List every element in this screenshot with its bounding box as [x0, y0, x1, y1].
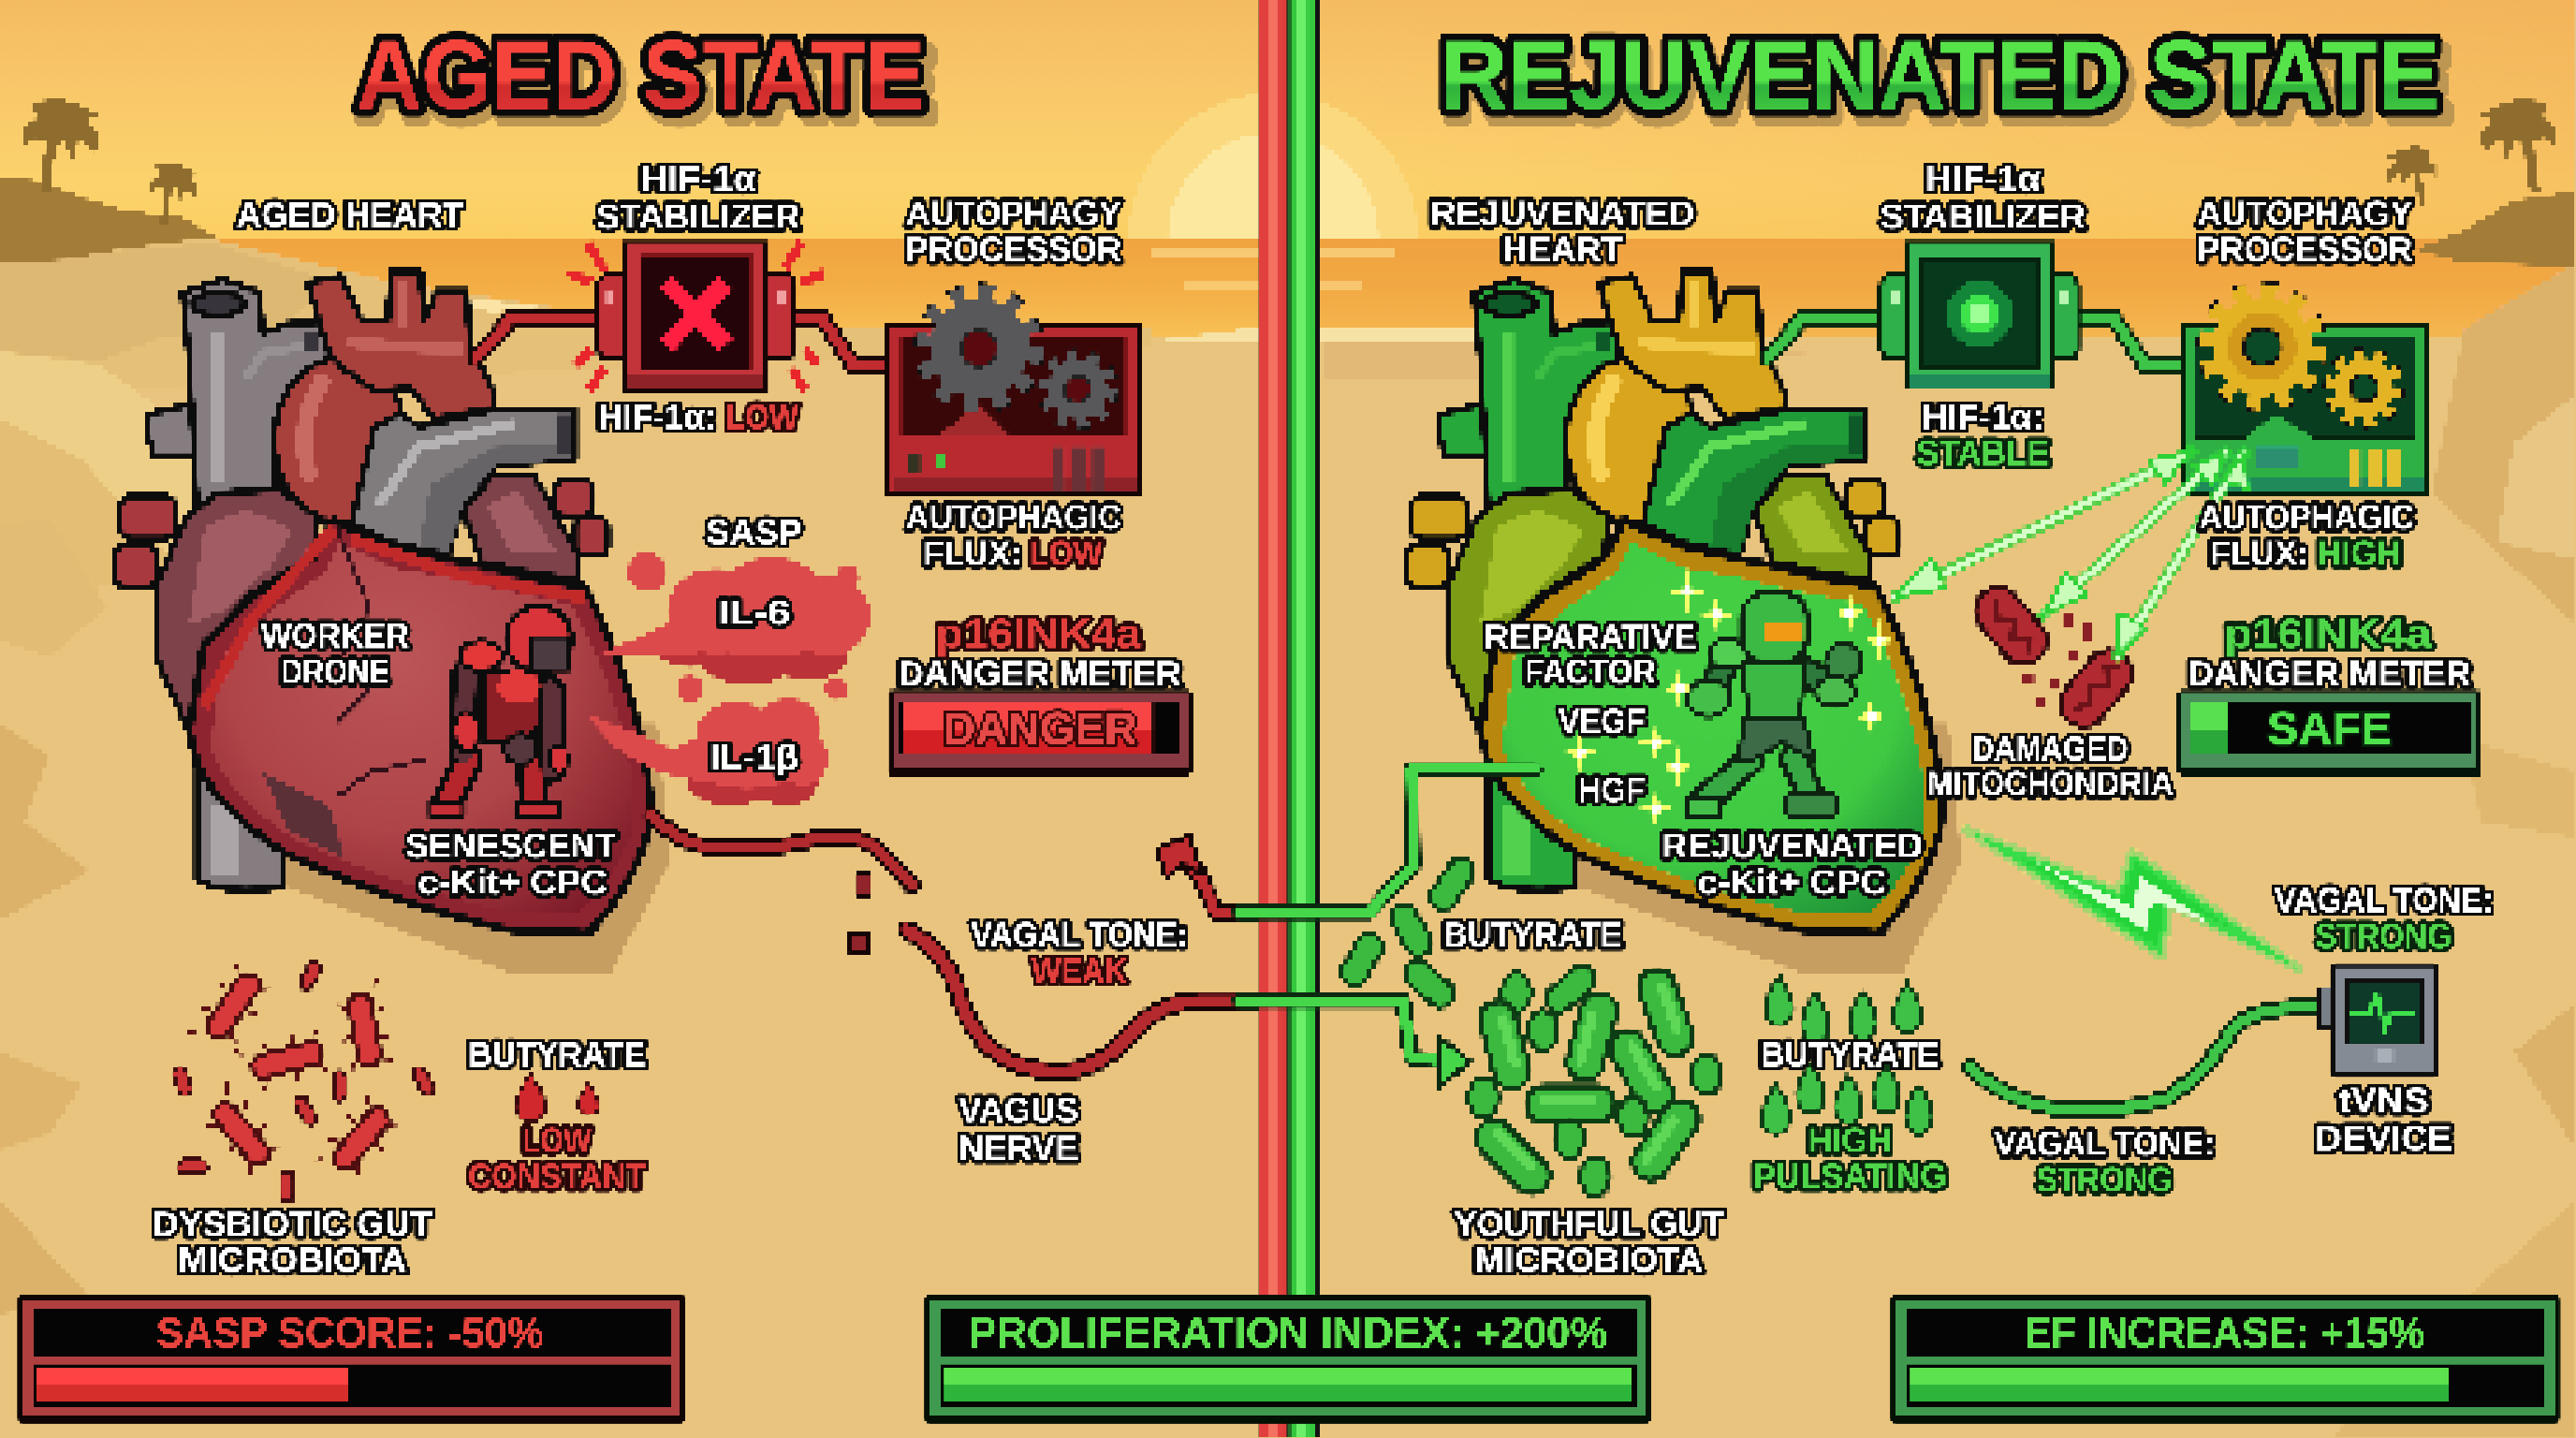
label: butyrate low constant: [468, 1035, 646, 1196]
label: HIF-1α stable: [1916, 398, 2049, 473]
label: HIF-1α stabilizer right: STABILIZER: [1881, 198, 2086, 236]
label: aged heart: AGED HEART: [237, 196, 463, 234]
label: vagal tone strong, cable: [1995, 1124, 2215, 1198]
label: autophagic flux high: HIGH: [2318, 535, 2401, 573]
tVNS cable: [1969, 1007, 2318, 1110]
aged heart: [115, 271, 670, 973]
label: p16INK4a danger meter: [899, 611, 1181, 693]
label: vagus nerve: VAGUS: [959, 1092, 1078, 1130]
headland left: [0, 178, 217, 263]
palm trees: [23, 98, 2556, 224]
aged worker drone figure: [431, 607, 572, 816]
label: dysbiotic gut microbiota: [153, 1205, 432, 1279]
icon: autophagy processor with grey gears: [889, 292, 1140, 493]
label: senescent c-Kit+ CPC: [406, 827, 617, 902]
labels: IL-6 and IL-1β: [710, 594, 798, 776]
aged gut bacteria: [171, 960, 437, 1201]
label: p16INK4a danger meter: p16INK4a: [936, 611, 1142, 657]
label: butyrate low constant: BUTYRATE: [468, 1035, 646, 1074]
title: rejuvenated state: REJUVENATED STATE: [1441, 21, 2439, 130]
label: HIF-1α stabilizer: STABILIZER: [596, 198, 800, 236]
green signal connection from heart across the divider: [1240, 769, 1534, 912]
label: HIF-1α stabilizer: [596, 160, 800, 236]
arrow: weak signal pointing back up-left: [1157, 835, 1258, 912]
meter text: danger: DANGER: [943, 704, 1137, 755]
label: worker drone: WORKER: [261, 617, 409, 655]
label: butyrate near gut: BUTYRATE: [1443, 916, 1622, 954]
label: rejuvenated heart: REJUVENATED: [1430, 194, 1694, 232]
label: tVNS device: DEVICE: [2316, 1120, 2452, 1158]
icon: damaged mitochondria: [1966, 579, 2142, 736]
label: autophagy processor right: [2197, 194, 2412, 269]
label: p16INK4a danger meter right: [2188, 611, 2471, 693]
vagus nerve, lower segment: [907, 930, 1258, 1072]
label: rejuvenated c-Kit+ CPC: REJUVENATED: [1661, 827, 1923, 865]
red butyrate droplets: [516, 1075, 599, 1123]
label: rejuvenated heart: [1430, 194, 1694, 269]
label: autophagic flux low: LOW: [1030, 535, 1103, 573]
label: butyrate high pulsating: [1753, 1035, 1947, 1196]
label: vagal tone weak: [971, 916, 1188, 990]
label: vagal tone strong, lightning: [2275, 881, 2493, 956]
label: HIF-1α low: HIF-1α:: [598, 398, 716, 436]
label: autophagic flux low: FLUX:: [923, 535, 1022, 573]
label: worker drone: DRONE: [281, 653, 389, 691]
label: autophagy processor right: AUTOPHAGY: [2197, 194, 2412, 232]
title: rejuvenated state: REJUVENATED STATE: [1444, 30, 2450, 139]
SASP cloud: IL-6: [593, 552, 871, 701]
label: vagal tone strong, cable: STRONG: [2036, 1160, 2173, 1198]
stat panel: EF increase: EF INCREASE: +15%: [2024, 1309, 2425, 1357]
rejuvenated c-Kit+ CPC figure: [1687, 594, 1862, 816]
stat panel: proliferation index: PROLIFERATION INDEX: +200%: [969, 1309, 1607, 1357]
label: butyrate high pulsating: BUTYRATE: [1761, 1035, 1939, 1074]
label: autophagic flux low: AUTOPHAGIC: [906, 498, 1121, 536]
SASP cloud: IL-1β: [583, 698, 828, 805]
label: reparative factor: FACTOR: [1525, 653, 1656, 691]
aged wires: [476, 317, 890, 366]
labels: IL-6 and IL-1β: IL-1β: [710, 738, 798, 776]
green butyrate droplets: [1763, 976, 1933, 1134]
label: butyrate high pulsating: PULSATING: [1753, 1157, 1947, 1196]
label: dysbiotic gut microbiota: MICROBIOTA: [178, 1240, 406, 1279]
label: senescent c-Kit+ CPC: SENESCENT: [406, 827, 617, 865]
label: vagal tone strong, cable: VAGAL TONE:: [1995, 1124, 2215, 1163]
icon: autophagy processor with golden gears: [2182, 291, 2428, 493]
label: autophagy processor: AUTOPHAGY: [906, 194, 1121, 232]
icon: failed HIF-1α stabilizer: [568, 242, 825, 391]
label: dysbiotic gut microbiota: DYSBIOTIC GUT: [153, 1205, 432, 1243]
danger meter: p16INK4a: [887, 690, 1193, 775]
label: vagus nerve: NERVE: [959, 1129, 1078, 1167]
label: p16INK4a danger meter: DANGER METER: [899, 654, 1181, 693]
labels: VEGF and HGF: [1559, 702, 1646, 809]
title: aged state: AGED STATE: [357, 21, 925, 130]
label: HIF-1α low: [598, 398, 798, 436]
sparkles: [1562, 570, 1897, 829]
label: autophagic flux low: [906, 498, 1121, 573]
label: tVNS device: [2316, 1081, 2452, 1158]
meter text: safe: SAFE: [2267, 704, 2392, 755]
stat panel: SASP score: [18, 1295, 685, 1423]
aged vagus nerve, upper broken segment: [652, 815, 912, 951]
label: rejuvenated c-Kit+ CPC: c-Kit+ CPC: [1698, 863, 1887, 902]
label: worker drone: [261, 617, 409, 691]
label: HIF-1α stabilizer right: HIF-1α: [1925, 160, 2041, 198]
label: SASP: SASP: [707, 513, 801, 551]
lightning bolt from tVNS device: [1967, 829, 2300, 970]
label: damaged mitochondria: MITOCHONDRIA: [1927, 764, 2174, 802]
label: vagal tone strong, lightning: STRONG: [2316, 917, 2452, 956]
label: youthful gut microbiota: [1454, 1205, 1724, 1279]
label: HIF-1α stable: STABLE: [1916, 434, 2049, 473]
headland right: [2415, 191, 2576, 266]
rejuvenated heart: [1406, 271, 1962, 973]
label: reparative factor: REPARATIVE: [1485, 618, 1696, 656]
label: HIF-1α low: LOW: [726, 398, 798, 436]
label: p16INK4a danger meter right: p16INK4a: [2224, 611, 2432, 657]
stat panel: proliferation index: [925, 1295, 1651, 1423]
label: butyrate high pulsating: HIGH: [1808, 1121, 1892, 1159]
label: butyrate low constant: LOW: [522, 1121, 592, 1159]
icon: tVNS device: [2318, 964, 2437, 1077]
label: p16INK4a danger meter right: DANGER METER: [2188, 654, 2471, 693]
title: aged state: AGED STATE: [359, 30, 935, 139]
label: vagal tone weak: WEAK: [1032, 952, 1127, 990]
label: butyrate low constant: CONSTANT: [468, 1157, 646, 1196]
label: rejuvenated heart: HEART: [1502, 230, 1623, 269]
stat panel: EF increase: [1891, 1295, 2559, 1423]
label: youthful gut microbiota: YOUTHFUL GUT: [1454, 1205, 1724, 1243]
label: autophagic flux high: FLUX:: [2210, 535, 2308, 573]
danger meter: safe: [2177, 690, 2482, 775]
labels: VEGF and HGF: VEGF: [1559, 702, 1646, 741]
label: damaged mitochondria: [1927, 730, 2174, 802]
label: youthful gut microbiota: MICROBIOTA: [1474, 1240, 1703, 1279]
label: HIF-1α stabilizer: HIF-1α: [640, 160, 756, 198]
label: reparative factor: [1485, 618, 1696, 691]
label: autophagy processor right: PROCESSOR: [2197, 230, 2412, 269]
icon: active HIF-1α stabilizer: [1881, 243, 2078, 388]
rejuvenated wires: [1767, 317, 2185, 366]
arrows: autophagy processor clearing mitochondria: [1895, 452, 2247, 655]
label: damaged mitochondria: DAMAGED: [1972, 730, 2129, 769]
youthful gut bacteria: [1337, 854, 1721, 1201]
label: autophagy processor: PROCESSOR: [906, 230, 1121, 269]
label: autophagic flux high: AUTOPHAGIC: [2199, 498, 2414, 536]
label: rejuvenated c-Kit+ CPC: [1661, 827, 1923, 902]
label: vagal tone strong, lightning: VAGAL TONE:: [2275, 881, 2493, 919]
green signal connection to gut: [1240, 1001, 1471, 1088]
labels: IL-6 and IL-1β: IL-6: [718, 594, 790, 632]
label: vagus nerve: [959, 1092, 1078, 1167]
divider: red and green centre lines: [1257, 0, 1319, 1438]
label: tVNS device: tVNS: [2338, 1081, 2429, 1120]
labels: VEGF and HGF: HGF: [1578, 770, 1646, 809]
label: autophagy processor: [906, 194, 1121, 269]
stat panel: SASP score: SASP SCORE: -50%: [156, 1309, 544, 1357]
label: HIF-1α stabilizer right: [1881, 160, 2086, 236]
label: vagal tone weak: VAGAL TONE:: [971, 916, 1188, 954]
label: senescent c-Kit+ CPC: c-Kit+ CPC: [418, 863, 607, 902]
label: autophagic flux high: [2199, 498, 2414, 573]
label: HIF-1α stable: HIF-1α:: [1922, 398, 2043, 436]
